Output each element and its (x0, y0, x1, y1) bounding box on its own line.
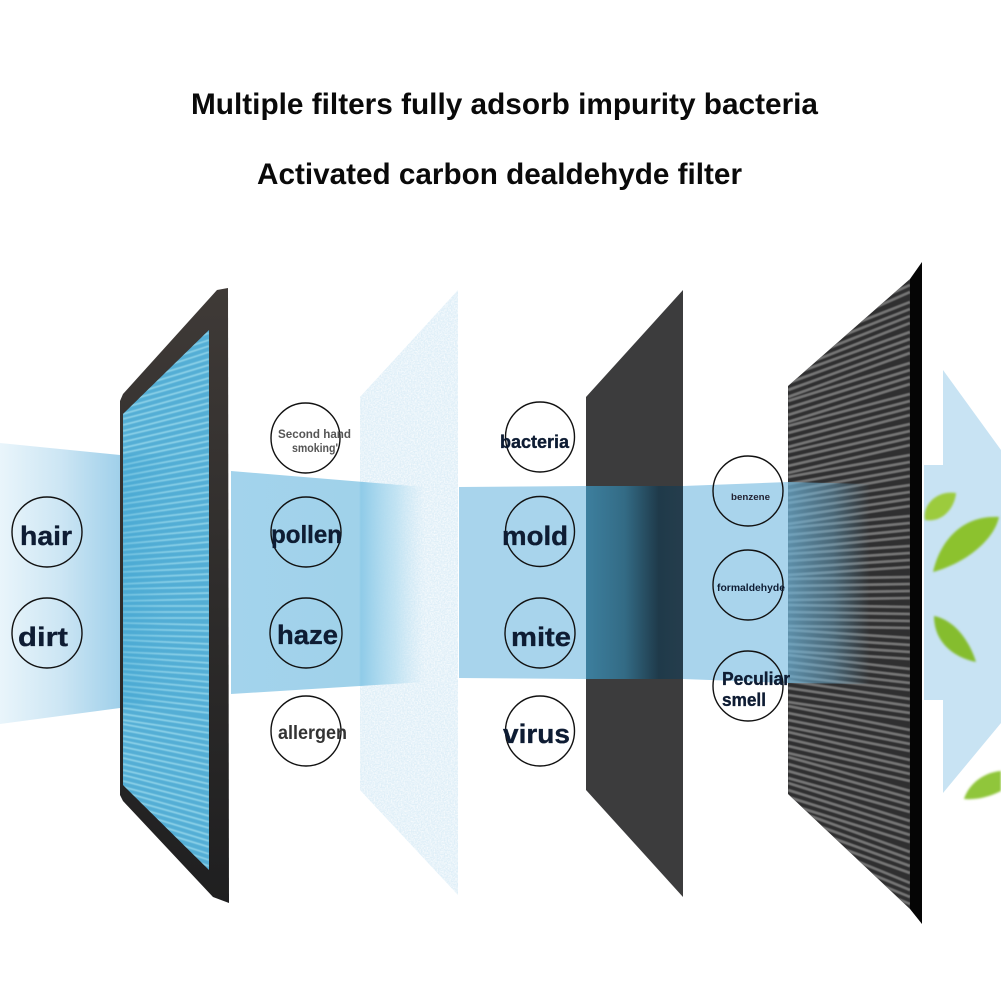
label: bacteria: bacteria (500, 431, 570, 452)
arrow: clean air outflow (924, 370, 1001, 793)
label: mite (505, 598, 575, 668)
label: bacteria (500, 402, 574, 472)
label: allergen (271, 696, 347, 766)
label: allergen: allergen (278, 723, 347, 744)
air band between dark and carbon filter (683, 482, 788, 683)
label: peculiar smell (713, 651, 790, 721)
label: second hand smoking: Second hand (278, 429, 351, 441)
label: benzene (713, 456, 783, 526)
label: virus: virus (503, 719, 570, 749)
air band between cotton and dark filter (459, 486, 586, 679)
air band through dark sheet (586, 486, 683, 679)
panel: blue HEPA filter (120, 283, 229, 942)
leaf 2 (933, 517, 999, 572)
label: virus (503, 696, 574, 766)
subtitle: Activated carbon dealdehyde filter (257, 158, 743, 191)
panel: pale cotton filter (360, 290, 458, 895)
label: hair (12, 497, 82, 567)
pleated blue medium (123, 330, 209, 870)
label: second hand smoking (271, 403, 351, 473)
label: pollen (271, 497, 342, 567)
leaf 4 (964, 771, 1001, 799)
icon: leaves (925, 493, 1001, 799)
label: dirt (12, 598, 82, 668)
title: Multiple filters fully adsorb impurity bacteria (191, 88, 819, 121)
label: pollen: pollen (271, 521, 342, 549)
label: peculiar smell: Peculiar (722, 669, 790, 689)
label: formaldehyde: formaldehyde (717, 582, 785, 594)
label: peculiar smell: smell (722, 690, 766, 710)
filter frame (120, 288, 229, 903)
label: mite: mite (511, 622, 571, 652)
air band fading in mesh (788, 482, 870, 684)
label: haze (270, 598, 342, 668)
label: benzene: benzene (731, 492, 770, 503)
label: second hand smoking: smoking' (292, 443, 338, 455)
incoming air band (0, 443, 120, 724)
label: hair: hair (20, 521, 73, 551)
leaf 1 (925, 493, 956, 520)
mesh body (788, 279, 910, 909)
label: formaldehyde (713, 550, 785, 620)
label: dirt: dirt (18, 622, 68, 652)
panel: carbon mesh filter (788, 241, 922, 965)
label: mold: mold (502, 521, 568, 551)
label: haze: haze (277, 620, 338, 650)
air band between first and second filter (231, 471, 425, 694)
leaf 3 (934, 616, 976, 662)
label: mold (502, 496, 574, 566)
black frame edge (910, 262, 922, 924)
air band passing through filter (123, 454, 160, 708)
panel: dark activated carbon sheet (586, 290, 683, 897)
